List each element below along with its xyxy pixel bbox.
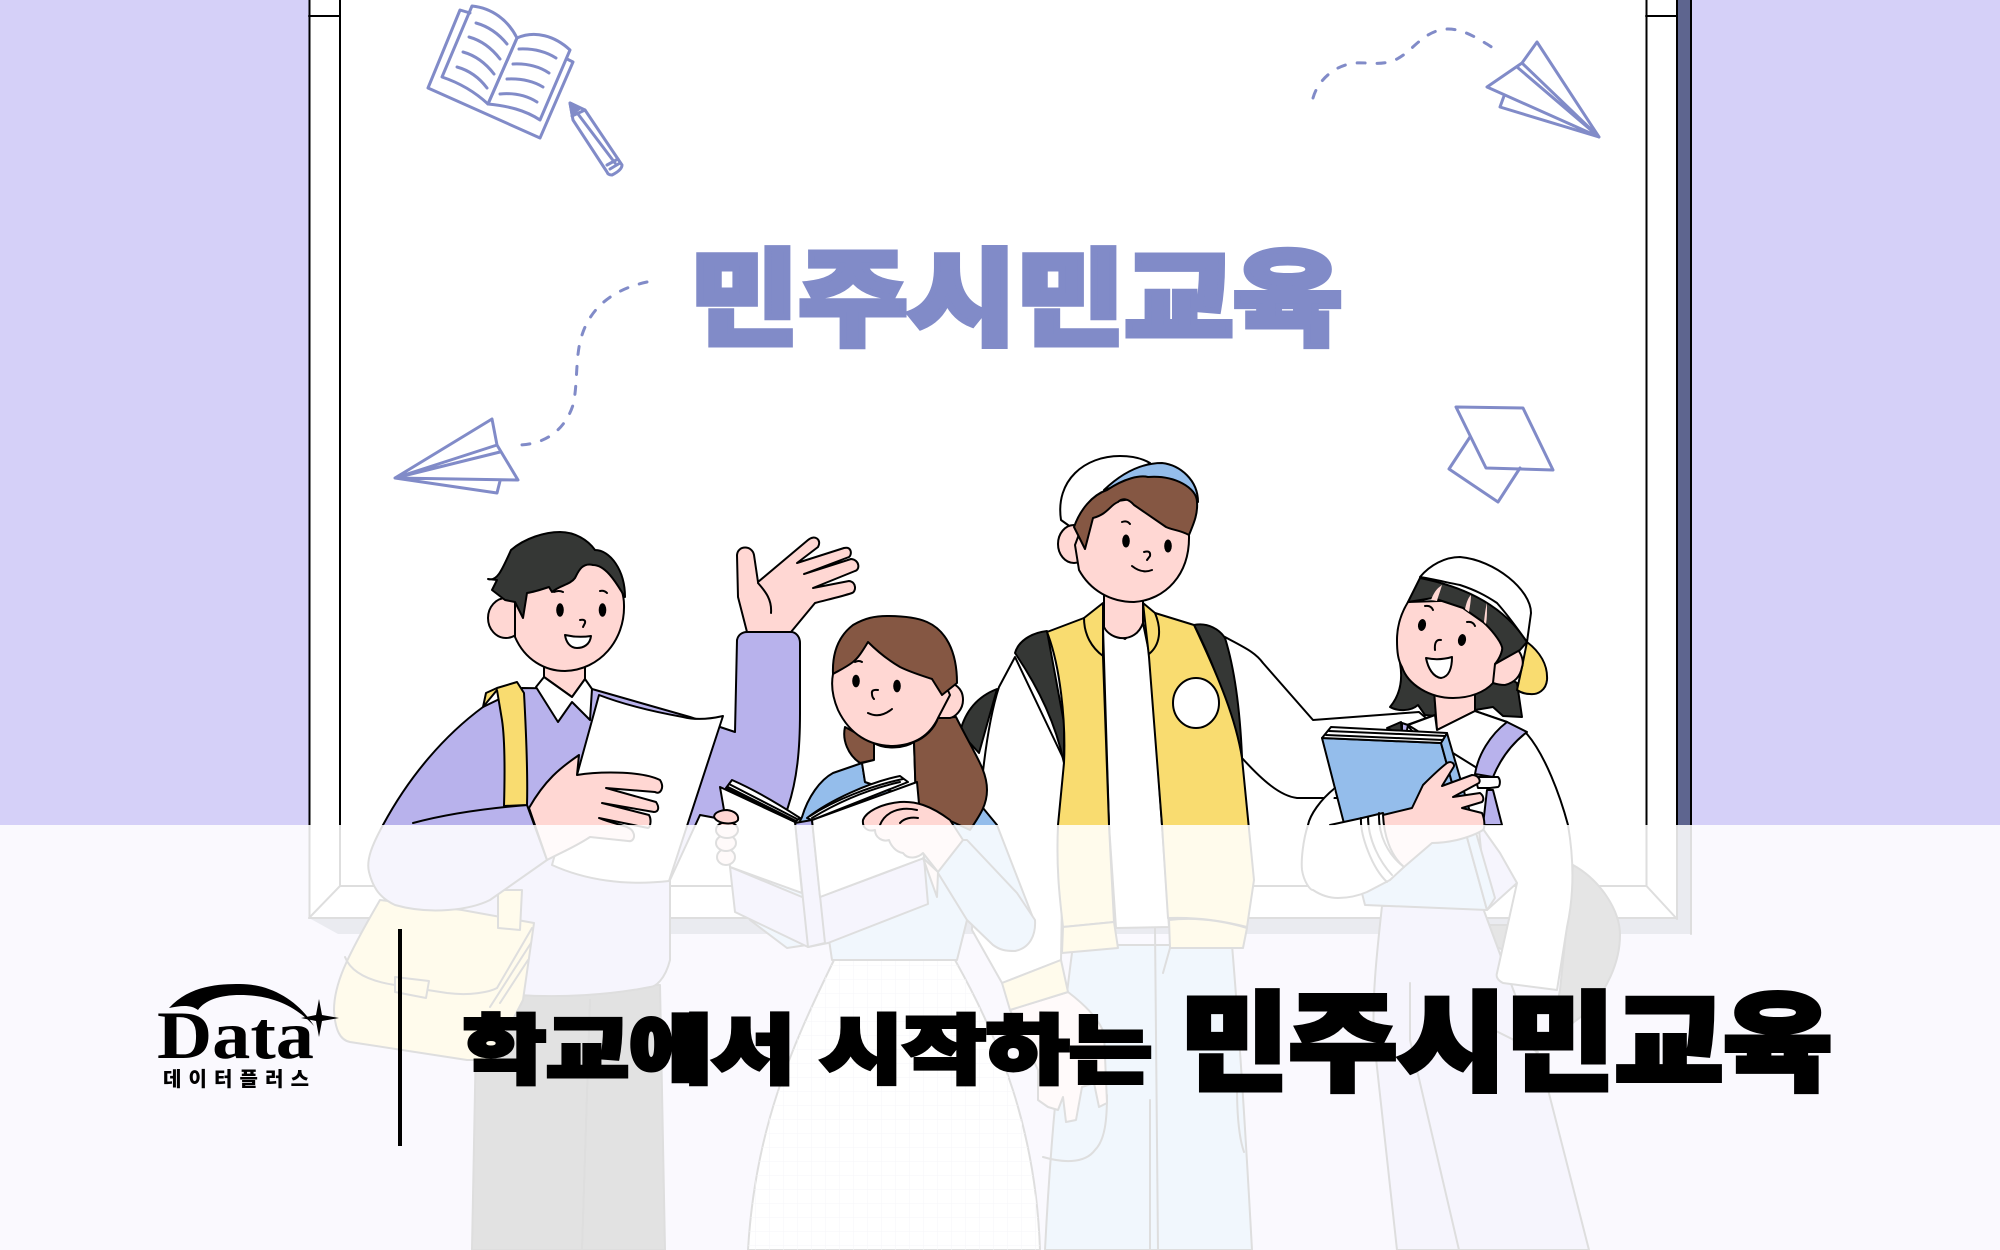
buckle (1475, 777, 1500, 788)
face features (1122, 534, 1130, 548)
blouse (750, 763, 1035, 960)
lower garment (1373, 900, 1589, 1250)
collar (1408, 711, 1507, 768)
hair top (833, 616, 957, 695)
dashed flight path left (517, 282, 647, 445)
right hand (1010, 992, 1107, 1122)
paper (552, 695, 723, 883)
right page (812, 782, 924, 897)
neck (1434, 690, 1475, 730)
hair (1074, 476, 1197, 549)
face (1397, 600, 1505, 698)
hand (1383, 762, 1484, 867)
character: girl skirt (748, 960, 1040, 1250)
hand on book (863, 802, 963, 897)
white shirt (862, 742, 916, 800)
features (1417, 618, 1427, 632)
window frame (309, 0, 1691, 934)
book spine (795, 820, 825, 947)
face (832, 635, 950, 746)
character: back bag of right girl (1458, 865, 1620, 1040)
shirt (1478, 820, 1517, 910)
hair (488, 532, 625, 618)
icon: graduation cap (1449, 407, 1553, 502)
cap (1060, 456, 1150, 530)
head (515, 555, 624, 671)
bag (334, 900, 534, 1060)
strap (483, 682, 527, 806)
headline: 학교에서 시작하는 (463, 1009, 1152, 1093)
blue sleeve (923, 840, 1035, 951)
small hair (844, 727, 874, 763)
face features (556, 603, 564, 617)
badge (1173, 678, 1219, 728)
hair bangs (1408, 578, 1527, 664)
title: 민주시민교육 (690, 243, 1342, 359)
backpack straps (1015, 631, 1064, 763)
bang gaps (1431, 585, 1487, 624)
cuffs lower (1062, 922, 1118, 953)
icon: open book (428, 6, 573, 138)
icon: paper plane right (1487, 42, 1599, 137)
character: reading girl (714, 616, 1035, 960)
cuff (1002, 960, 1068, 1010)
inner shirt (1103, 623, 1169, 928)
character: right girl (1302, 557, 1589, 1250)
sweater torso and raised arm (383, 632, 800, 996)
ear (1493, 650, 1523, 685)
vest (1047, 603, 1114, 927)
icon: pencil (570, 103, 622, 175)
back hair (1390, 663, 1522, 717)
pants (472, 985, 665, 1250)
cap (1420, 557, 1531, 642)
dark and purple bits behind book (1387, 722, 1408, 735)
headline: 민주시민교육 (1180, 984, 1832, 1104)
brim (1517, 642, 1547, 694)
purple strap (1475, 722, 1527, 777)
ear (488, 598, 524, 638)
jacket body (1407, 711, 1572, 990)
hand (529, 755, 662, 860)
back bag (960, 689, 997, 753)
collar (544, 660, 585, 697)
page stacks (726, 776, 908, 822)
dashed flight path right (1313, 29, 1498, 98)
book lower cover (730, 858, 928, 947)
long hair (914, 717, 987, 830)
left fingers (714, 810, 738, 865)
pants (1045, 945, 1252, 1250)
logo: Data Plus: 데이터플러스 (163, 1068, 309, 1091)
logo: Data Plus (157, 984, 339, 1091)
sleeve (368, 805, 547, 910)
character: tall boy (960, 456, 1440, 1250)
blue book (1322, 738, 1487, 910)
head (1058, 525, 1090, 563)
neck (1104, 590, 1143, 638)
divider (398, 929, 402, 1146)
left sleeve (1302, 788, 1404, 898)
icon: paper plane left (395, 419, 518, 493)
ear (938, 683, 963, 718)
arms (972, 637, 1440, 983)
left page (720, 787, 802, 893)
logo: Data Plus: Data (157, 997, 314, 1073)
headline (463, 984, 1832, 1104)
features (852, 675, 860, 687)
white translucent panel (0, 825, 2000, 1250)
character: left boy (334, 532, 858, 1250)
